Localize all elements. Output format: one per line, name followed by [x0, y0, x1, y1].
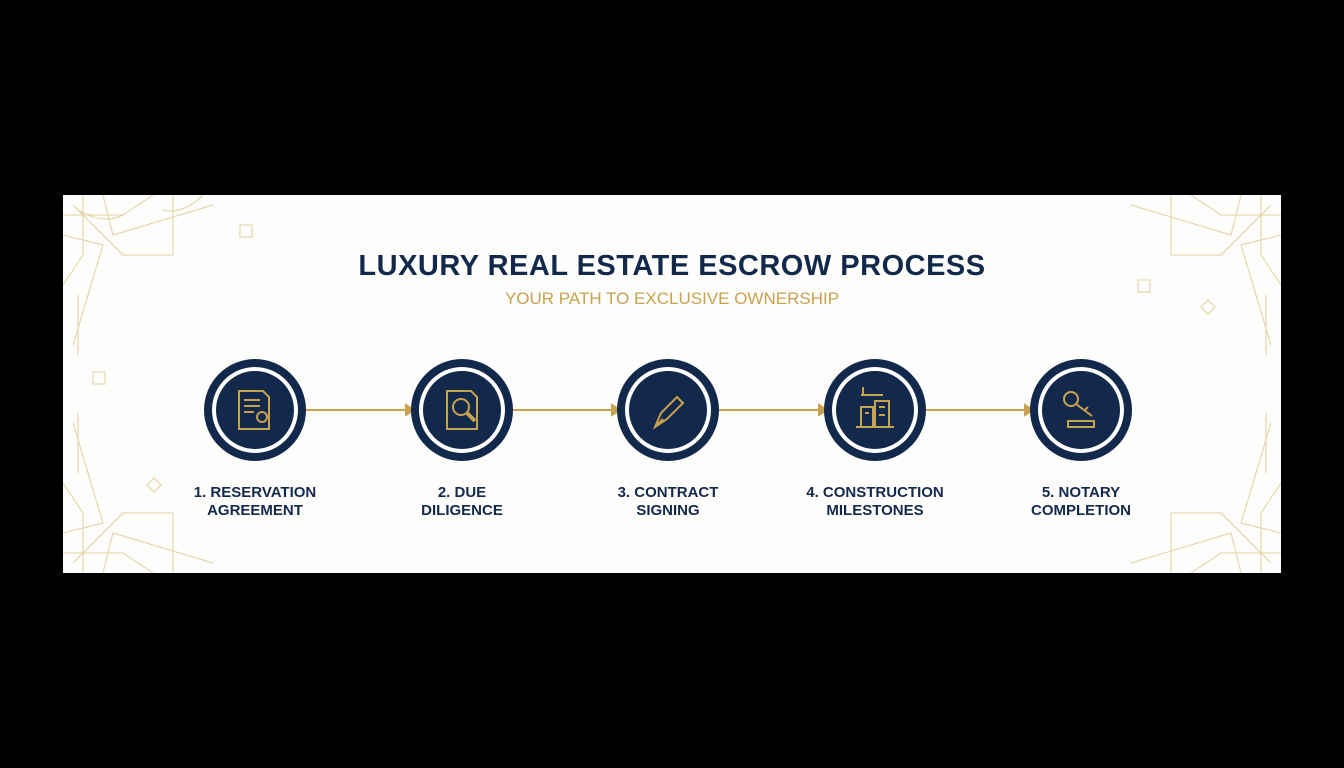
label 5 — [1031, 484, 1131, 519]
label 5: COMPLETION — [1031, 502, 1131, 519]
panel: main card — [63, 195, 1281, 573]
label 1: 1. RESERVATION — [194, 484, 316, 501]
label 2 — [421, 484, 503, 519]
label 3: SIGNING — [636, 502, 700, 519]
label 1: AGREEMENT — [207, 502, 303, 519]
label 1 — [194, 484, 316, 519]
label 5: 5. NOTARY — [1042, 484, 1120, 501]
title: LUXURY REAL ESTATE ESCROW PROCESS — [358, 250, 986, 282]
label 4: 4. CONSTRUCTION — [806, 484, 944, 501]
icons — [239, 387, 1094, 429]
subtitle: YOUR PATH TO EXCLUSIVE OWNERSHIP — [505, 289, 839, 308]
label 3: 3. CONTRACT — [618, 484, 718, 501]
decorative corners — [63, 195, 1281, 573]
label 2: DILIGENCE — [421, 502, 503, 519]
label 3 — [618, 484, 718, 519]
label 2: 2. DUE — [438, 484, 486, 501]
arrows — [306, 405, 1033, 415]
step circles — [204, 359, 306, 461]
label 4: MILESTONES — [826, 502, 924, 519]
process diagram: circles and arrows — [204, 359, 1132, 461]
label 4 — [806, 484, 944, 519]
